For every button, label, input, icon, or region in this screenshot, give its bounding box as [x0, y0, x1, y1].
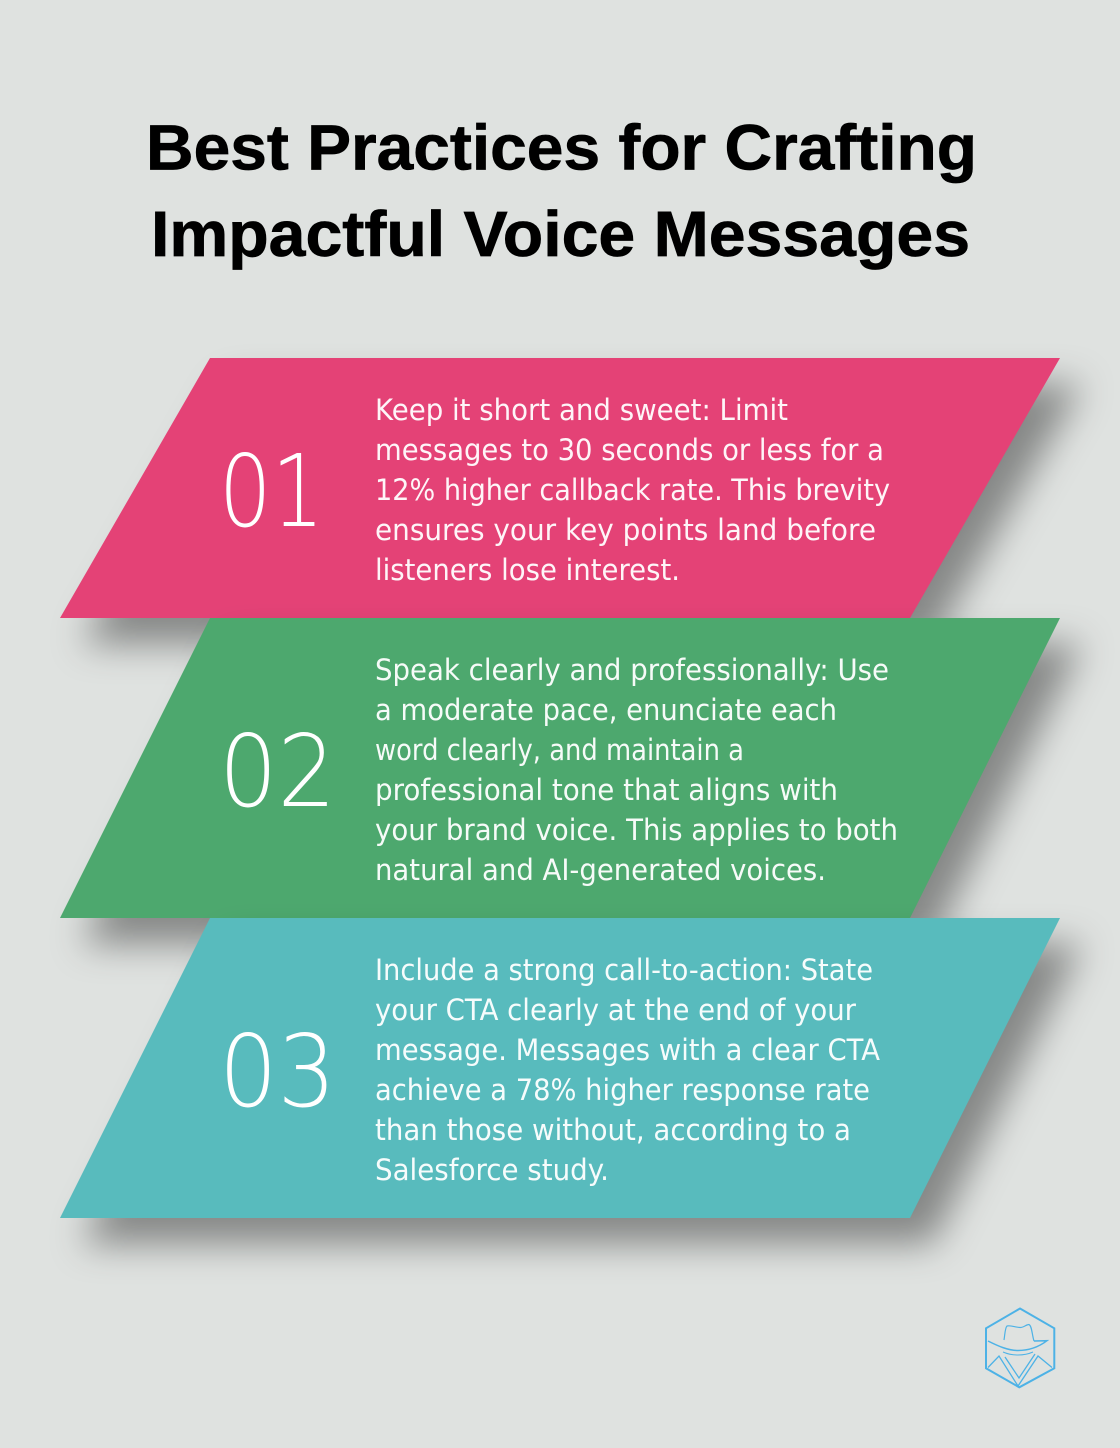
title: Impactful Voice Messages	[151, 198, 970, 270]
text: step 02: your brand voice. This applies to both	[375, 813, 898, 847]
panel: step 01	[60, 358, 1082, 644]
text: step 01: listeners lose interest.	[375, 553, 680, 587]
text: step 02: natural and AI-generated voices.	[375, 853, 826, 887]
text: step 01	[375, 393, 890, 587]
text: step 02: a moderate pace, enunciate each	[375, 693, 837, 727]
text: step 02: word clearly, and maintain a	[375, 733, 744, 767]
pink parallelogram	[60, 358, 1060, 618]
text: step 01: Keep it short and sweet: Limit	[375, 393, 788, 427]
teal parallelogram	[60, 918, 1060, 1218]
text: step 03: message. Messages with a clear CTA	[375, 1033, 880, 1067]
text: step 02: Speak clearly and professionally: Use	[375, 653, 889, 687]
text: step 01: 12% higher callback rate. This brevity	[375, 473, 890, 507]
icon: spy logo	[986, 1308, 1054, 1387]
text: step 03	[375, 953, 880, 1187]
number 03: 03	[219, 1013, 336, 1130]
text: step 03: your CTA clearly at the end of your	[375, 993, 856, 1027]
text: step 01: messages to 30 seconds or less for a	[375, 433, 884, 467]
text: step 02	[375, 653, 898, 887]
text: step 03: Include a strong call-to-action: State	[375, 953, 873, 987]
title: Best Practices for Crafting	[146, 112, 977, 184]
title	[146, 112, 977, 270]
text: step 03: Salesforce study.	[375, 1153, 609, 1187]
text: step 01: ensures your key points land before	[375, 513, 876, 547]
number 02: 02	[219, 713, 336, 830]
text: step 03: than those without, according to a	[375, 1113, 851, 1147]
panel: step 02	[60, 618, 1082, 944]
green parallelogram	[60, 618, 1060, 918]
number 01: 01	[219, 433, 324, 550]
text: step 03: achieve a 78% higher response rate	[375, 1073, 870, 1107]
panel: step 03	[60, 918, 1082, 1244]
text: step 02: professional tone that aligns with	[375, 773, 838, 807]
